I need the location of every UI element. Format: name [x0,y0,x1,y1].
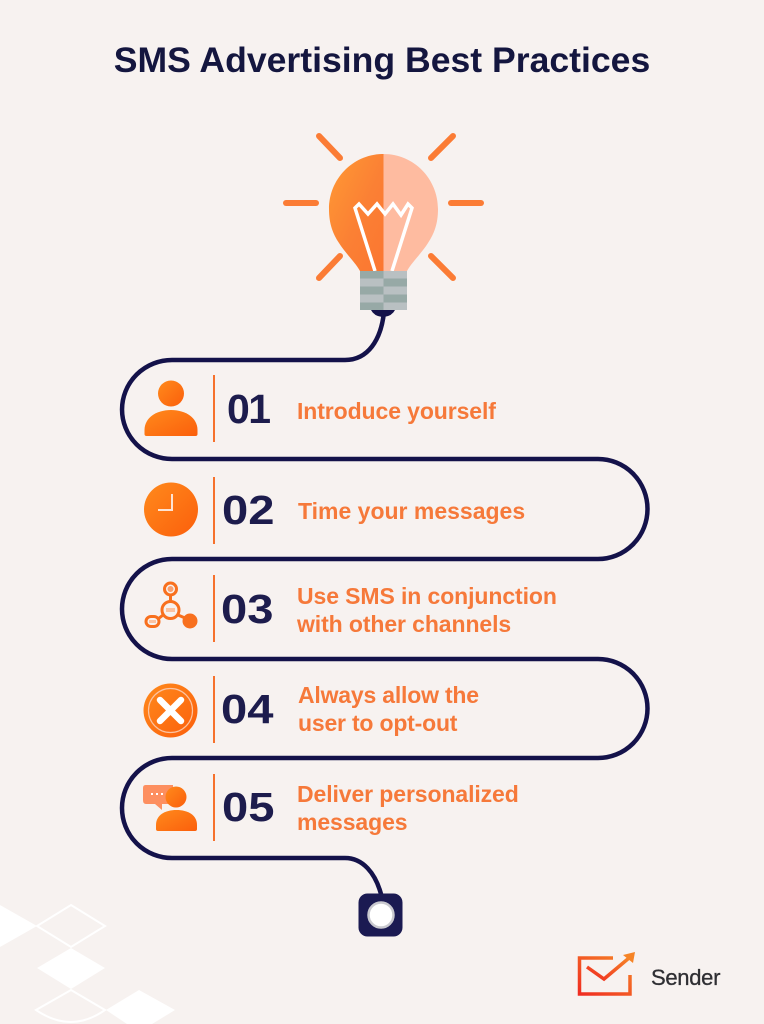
step text [298,682,479,736]
step text: Always allow the [298,682,479,708]
icon: channel network [144,582,198,628]
step text [297,781,519,835]
divider [213,774,215,841]
icon: person with speech bubble [143,785,197,831]
step text: user to opt-out [298,710,457,736]
step text [297,583,557,637]
logo wordmark: Sender [651,965,720,990]
step text: Introduce yourself [297,398,496,424]
divider [213,676,215,743]
number 01: 01 [227,386,270,432]
icon: person [144,380,198,436]
panel: step 05 [143,774,519,841]
step text: Use SMS in conjunction [297,583,557,609]
number 04: 04 [221,686,273,732]
divider [213,477,215,544]
divider [213,375,215,442]
step text: Time your messages [298,498,525,524]
panel: step 03 [144,575,557,642]
panel: step 04 [144,676,479,743]
icon: envelope with arrow [578,952,635,996]
step text: with other channels [297,611,511,637]
icon: clock [144,482,198,536]
title: SMS Advertising Best Practices [114,40,650,80]
number 05: 05 [222,784,274,830]
step text: messages [297,809,407,835]
number 03: 03 [221,586,273,632]
step text: Deliver personalized [297,781,519,807]
panel: step 02 [144,477,525,544]
icon: cancel cross [144,684,198,738]
number 02: 02 [222,487,274,533]
divider [213,575,215,642]
logo: Sender [578,952,720,996]
panel: step 01 [144,375,496,442]
